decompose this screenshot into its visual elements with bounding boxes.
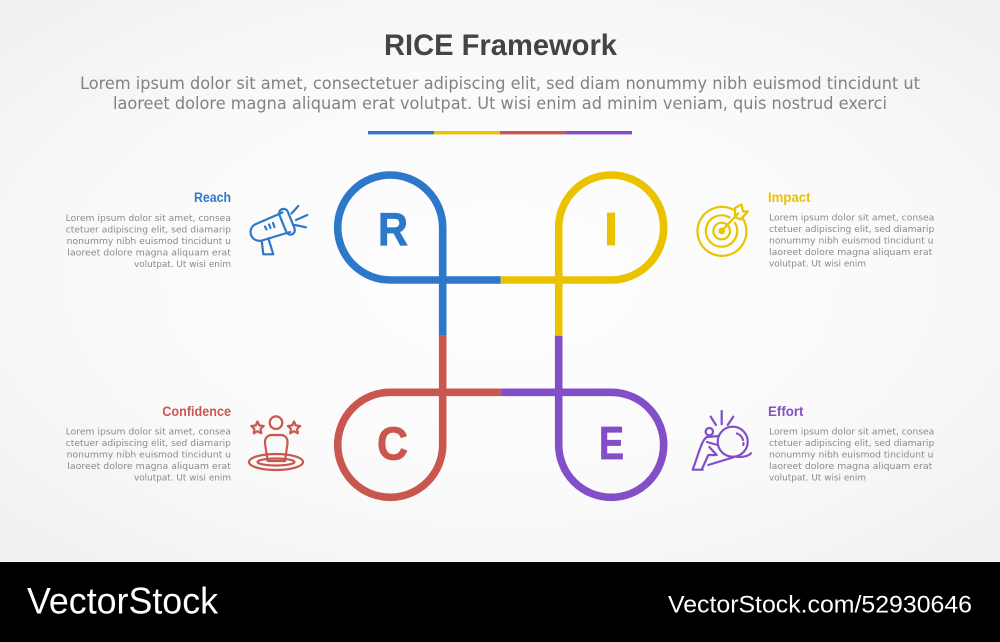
subtitle text block: [80, 74, 921, 113]
icon: person with stars: [249, 416, 303, 470]
text block: reach: [66, 213, 231, 270]
text block: reach: volutpat. Ut wisi enim: [134, 259, 231, 270]
subtitle text block: Lorem ipsum dolor sit amet, consectetuer adipiscing elit, sed diam nonummy nibh euismod tincidunt ut: [80, 74, 921, 93]
text block: effort: [769, 426, 934, 484]
text block: confidence: nonummy nibh euismod tincidunt u: [67, 450, 231, 460]
heading: impact: Impact: [768, 190, 811, 205]
text block: confidence: [66, 426, 231, 484]
icon: person pushing boulder: [693, 411, 751, 470]
text block: impact: Lorem ipsum dolor sit amet, consea: [769, 212, 934, 224]
loop: confidence: [338, 336, 501, 497]
text block: effort: ctetuer adipiscing elit, sed diamarip: [769, 438, 934, 449]
footer bar: [0, 562, 1000, 642]
loop: impact: [501, 175, 664, 336]
panel: reach: [66, 190, 307, 270]
heading: effort: Effort: [768, 404, 804, 419]
text block: effort: Lorem ipsum dolor sit amet, consea: [769, 426, 934, 438]
heading: reach: Reach: [194, 190, 231, 205]
text block: effort: volutpat. Ut wisi enim: [769, 472, 866, 484]
letter C: C: [377, 417, 408, 469]
text block: reach: ctetuer adipiscing elit, sed diamarip: [66, 224, 231, 236]
text block: confidence: laoreet dolore magna aliquam erat: [67, 461, 231, 472]
text block: confidence: ctetuer adipiscing elit, sed diamarip: [66, 438, 231, 449]
letter E: E: [599, 417, 624, 469]
text block: impact: laoreet dolore magna aliquam erat: [769, 247, 933, 258]
icon: megaphone: [251, 206, 307, 254]
letter R: R: [378, 203, 408, 255]
letter I: I: [604, 203, 618, 255]
text block: reach: laoreet dolore magna aliquam erat: [67, 248, 231, 258]
panel: impact: [697, 190, 934, 270]
text block: impact: ctetuer adipiscing elit, sed diamarip: [769, 224, 934, 235]
loop: effort: [501, 336, 664, 497]
subtitle text block: laoreet dolore magna aliquam erat volutpat. Ut wisi enim ad minim veniam, quis nostrud exerci: [113, 94, 887, 113]
text block: impact: volutpat. Ut wisi enim: [769, 258, 866, 270]
heading: confidence: Confidence: [162, 404, 231, 419]
panel: confidence: [66, 404, 303, 484]
four-colour divider: [368, 131, 632, 134]
footer image id: VectorStock.com/52930646: [668, 592, 972, 618]
text block: effort: laoreet dolore magna aliquam erat: [769, 461, 933, 472]
loop diagram: [338, 175, 664, 497]
text block: confidence: Lorem ipsum dolor sit amet, consea: [66, 426, 231, 438]
icon: target: [697, 204, 748, 256]
footer logo text: VectorStock: [27, 580, 218, 622]
text block: confidence: volutpat. Ut wisi enim: [134, 472, 231, 484]
text block: reach: nonummy nibh euismod tincidunt u: [67, 236, 231, 247]
panel: effort: [693, 404, 934, 484]
text block: impact: [769, 212, 934, 270]
title: RICE Framework: [384, 29, 617, 62]
loop: reach: [338, 175, 501, 336]
text block: effort: nonummy nibh euismod tincidunt u: [769, 450, 934, 460]
text block: impact: nonummy nibh euismod tincidunt u: [769, 236, 934, 246]
text block: reach: Lorem ipsum dolor sit amet, consea: [66, 213, 231, 224]
